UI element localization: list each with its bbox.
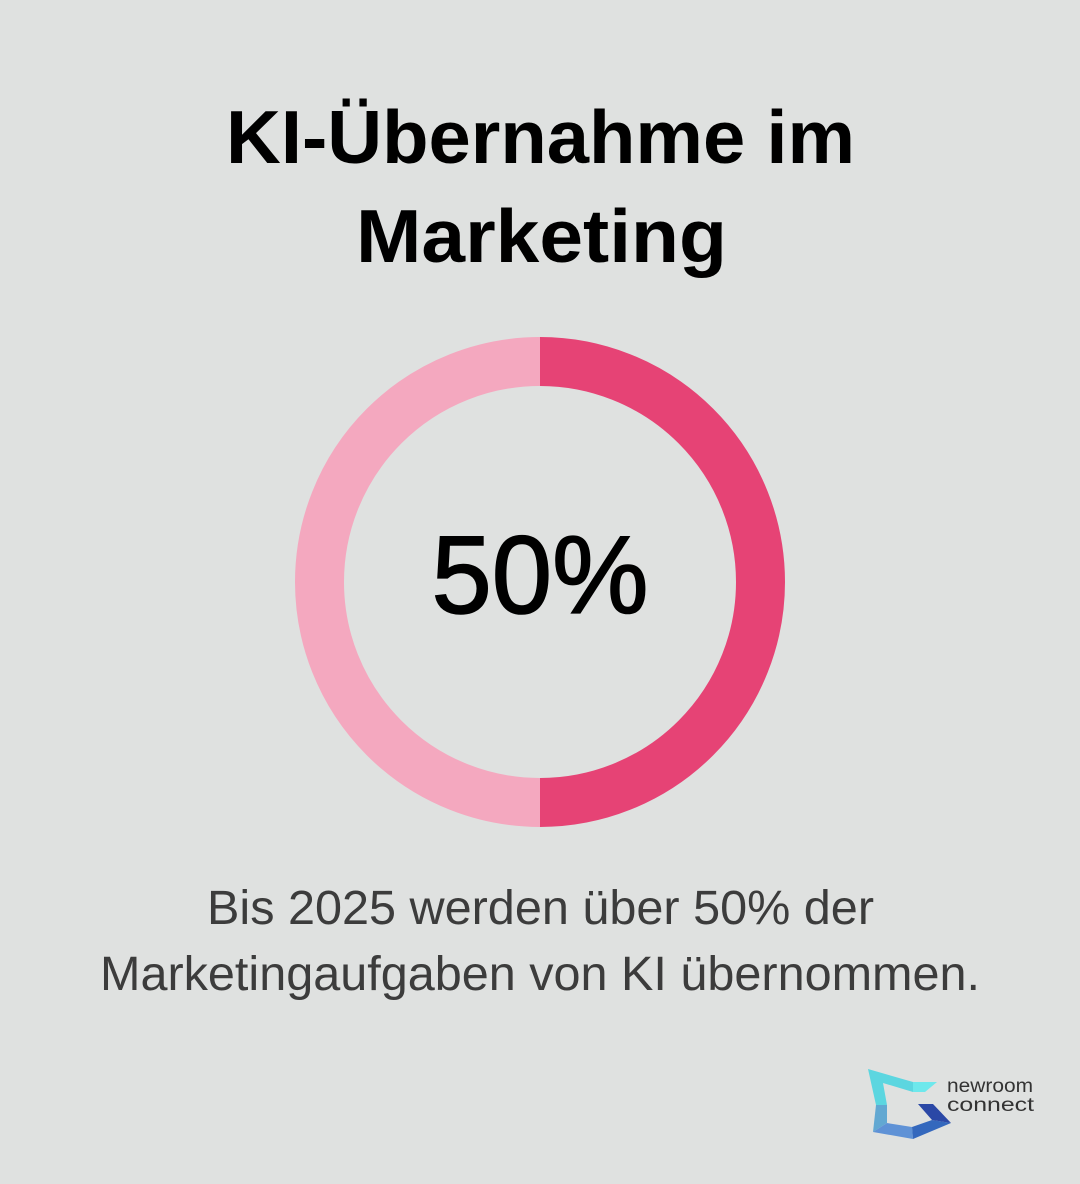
description text: Marketingaufgaben von KI übernommen. — [100, 948, 980, 1001]
donut chart: 50% — [320, 362, 760, 802]
title: KI-Übernahme im — [226, 95, 855, 179]
remaining segment — [320, 362, 540, 802]
logo mark — [868, 1069, 951, 1139]
center value: 50% — [432, 514, 648, 637]
description text: Bis 2025 werden über 50% der — [207, 882, 874, 935]
highlighted segment — [540, 362, 760, 802]
title: Marketing — [356, 194, 727, 278]
title — [226, 95, 855, 278]
logo wordmark: connect — [947, 1095, 1035, 1116]
description text — [100, 882, 980, 1001]
logo: newroom connect — [868, 1069, 1035, 1139]
logo wordmark: newroom — [947, 1076, 1033, 1097]
logo wordmark — [947, 1076, 1035, 1116]
